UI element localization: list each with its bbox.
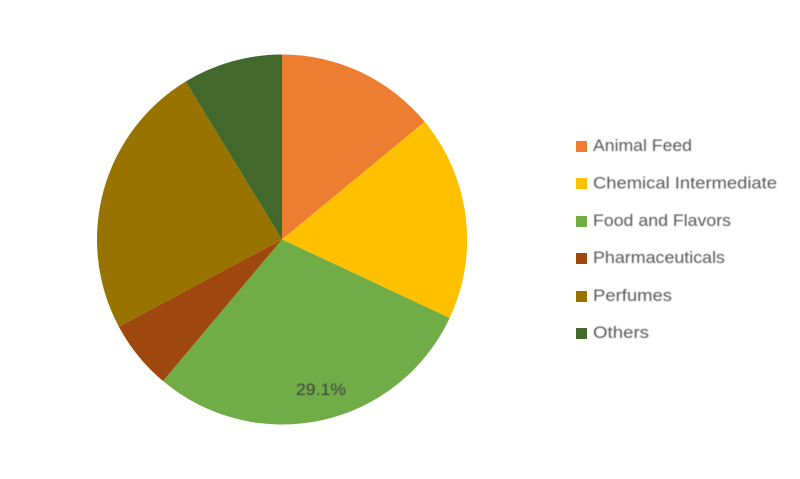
- legend item: Others: Others: [593, 324, 649, 342]
- legend item: Food and Flavors: Food and Flavors: [593, 212, 731, 230]
- legend item: Animal Feed: Animal Feed: [593, 137, 692, 155]
- slice: Chemical Intermediate: [282, 122, 467, 318]
- slice: Perfumes: [97, 82, 282, 327]
- pie chart: [97, 54, 467, 425]
- legend item: Pharmaceuticals: Pharmaceuticals: [593, 249, 725, 267]
- legend: [576, 137, 777, 342]
- legend item: Perfumes: Perfumes: [593, 287, 672, 305]
- data label: Food and Flavors percentage: 29.1%: [296, 381, 346, 399]
- slice: Animal Feed: [282, 54, 425, 240]
- legend item: Chemical Intermediate: Chemical Intermediate: [593, 174, 777, 192]
- legend item: Others: [576, 324, 649, 342]
- slice: Others: [186, 54, 282, 240]
- slice: Pharmaceuticals: [119, 240, 282, 381]
- slice: Food and Flavors: [163, 240, 450, 425]
